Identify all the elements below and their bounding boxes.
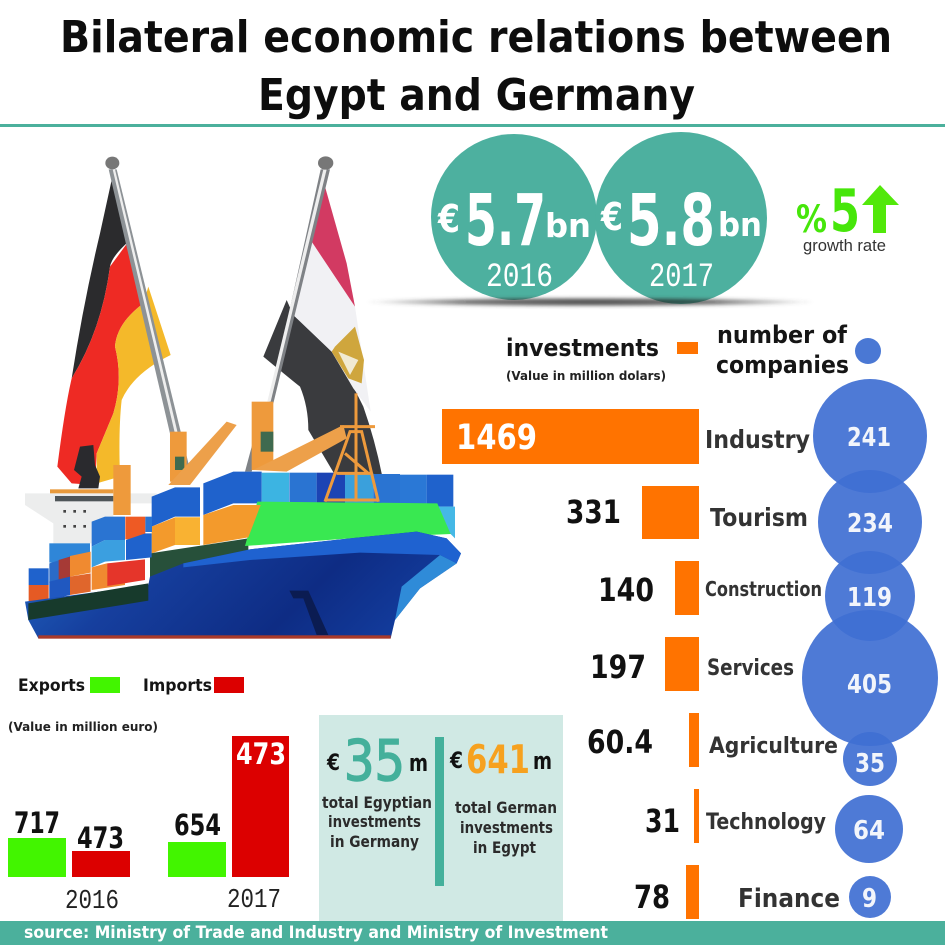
illustration: cargo ship with German and Egyptian flags xyxy=(25,156,461,639)
circle: 2017 xyxy=(595,132,767,304)
Egyptian investments: m xyxy=(409,749,428,777)
circle: 2016: 5.7 xyxy=(465,179,546,262)
Egyptian investments xyxy=(322,729,432,851)
circle: 2016: bn xyxy=(545,206,591,245)
growth rate xyxy=(796,176,899,255)
chart: company count bubbles xyxy=(802,379,938,918)
row: Finance: 78 xyxy=(634,878,670,916)
group: 2017 xyxy=(168,736,289,916)
row: Industry: 1469 xyxy=(456,418,537,458)
row: Technology xyxy=(645,789,826,843)
German investments: € xyxy=(449,749,463,774)
legend: exports and imports: (Value in million euro) xyxy=(8,720,158,734)
legend: exports and imports: Imports xyxy=(143,676,212,696)
group: 2017: 2017 xyxy=(227,886,281,916)
German investments xyxy=(449,738,557,857)
legend: exports and imports xyxy=(8,676,244,734)
cranes xyxy=(168,402,347,485)
Egyptian flag xyxy=(263,187,382,475)
containers xyxy=(29,472,455,602)
chart: company count bubbles: 119 xyxy=(847,583,892,613)
title xyxy=(60,12,892,121)
row: Services: Services xyxy=(707,656,794,681)
chart: investment bars by sector xyxy=(442,409,840,919)
growth rate: growth rate xyxy=(803,236,886,255)
German investments: in Egypt xyxy=(473,838,536,857)
chart: company count bubbles: 405 xyxy=(847,670,892,700)
row: Construction xyxy=(598,561,822,615)
German investments: m xyxy=(533,747,552,775)
group: 2016 xyxy=(8,806,130,917)
chart: company count bubbles: 9 xyxy=(862,884,877,914)
German investments: total German xyxy=(455,798,557,817)
Egyptian investments: 35 xyxy=(344,729,405,794)
Egyptian investments: total Egyptian xyxy=(322,793,432,812)
circle: 2016: € xyxy=(437,197,460,241)
German investments: investments xyxy=(460,818,553,837)
circle: 2016 xyxy=(431,134,597,300)
growth rate: 5 xyxy=(830,176,860,245)
row: Agriculture: 60.4 xyxy=(587,723,653,761)
superstructure and mast xyxy=(25,445,157,543)
group: 2016: 2016 xyxy=(65,887,119,917)
row: Agriculture: Agriculture xyxy=(709,734,838,759)
legend: investments and number of companies: (Value in million dolars) xyxy=(506,369,666,383)
German investments: 641 xyxy=(466,738,530,783)
circle: 2017: 2017 xyxy=(649,259,714,297)
legend: investments and number of companies xyxy=(506,321,881,383)
circle: 2016: 2016 xyxy=(486,259,553,297)
chart: company count bubbles: 35 xyxy=(855,749,885,779)
group: 2017: 654 xyxy=(174,808,221,842)
panel: total trade circles xyxy=(365,132,815,307)
Egyptian investments: in Germany xyxy=(330,832,419,851)
circle: 2017: bn xyxy=(718,205,762,244)
Egyptian investments: € xyxy=(326,751,340,776)
footer: source xyxy=(0,921,945,945)
group: 2016: 473 xyxy=(77,821,124,855)
Egyptian investments: investments xyxy=(328,812,421,831)
row: Industry xyxy=(442,409,810,464)
legend: investments and number of companies: companies xyxy=(716,351,849,379)
group: 2016: 717 xyxy=(14,806,60,840)
legend: exports and imports: Exports xyxy=(18,676,85,696)
title: Egypt and Germany xyxy=(258,70,695,121)
row: Technology: 31 xyxy=(645,802,680,840)
panel: total investments xyxy=(319,715,563,921)
icon: up arrow xyxy=(862,185,899,233)
row: Finance: Finance xyxy=(738,884,840,914)
row: Services: 197 xyxy=(590,648,646,686)
growth rate: % xyxy=(796,198,827,241)
chart: exports and imports bars xyxy=(8,736,289,917)
row: Construction: 140 xyxy=(598,571,654,609)
row: Industry: Industry xyxy=(705,425,810,454)
row: Technology: Technology xyxy=(706,810,826,835)
row: Services xyxy=(590,637,794,691)
row: Tourism xyxy=(566,486,808,539)
row: Finance xyxy=(634,865,840,919)
group: 2017: 473 xyxy=(236,737,286,771)
flagpoles xyxy=(105,156,333,477)
circle: 2017: 5.8 xyxy=(627,179,715,262)
footer: source: source: Ministry of Trade and Industry and Ministry of Investment xyxy=(24,923,608,943)
row: Tourism: 331 xyxy=(566,493,621,531)
legend: investments and number of companies: number of xyxy=(717,321,848,349)
German flag xyxy=(57,180,171,485)
chart: company count bubbles: 241 xyxy=(847,423,891,453)
chart: company count bubbles: 234 xyxy=(847,509,893,539)
legend: investments and number of companies: investments xyxy=(506,334,659,362)
row: Construction: Construction xyxy=(705,577,822,601)
circle: 2017: € xyxy=(600,195,623,239)
row: Agriculture xyxy=(587,713,838,767)
row: Tourism: Tourism xyxy=(710,503,808,532)
chart: company count bubbles: 64 xyxy=(853,816,885,846)
mast tower xyxy=(325,393,378,502)
ship hull xyxy=(25,532,461,639)
